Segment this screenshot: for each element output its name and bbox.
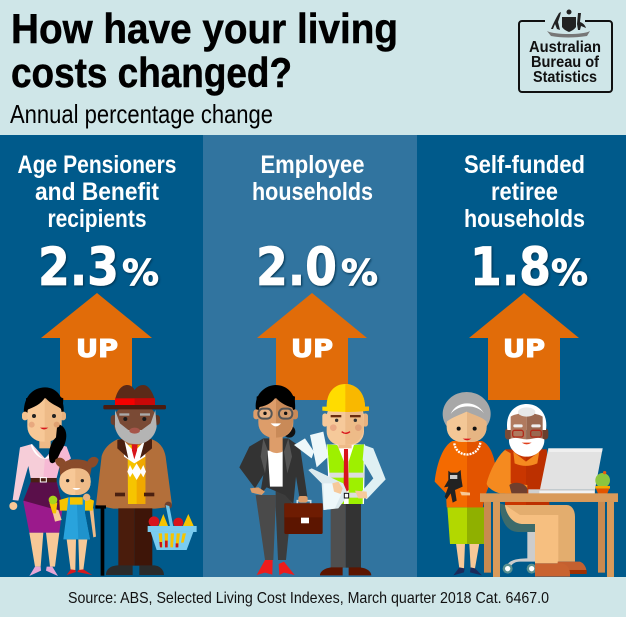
briefcase [284, 496, 323, 534]
heading: recipients [48, 205, 146, 233]
arrow: up: UP [503, 334, 545, 363]
heading: Self-funded [464, 151, 585, 179]
illustration: businesswoman and construction worker [239, 384, 386, 575]
percentage value: % [122, 253, 159, 294]
basket of fruit [148, 505, 197, 550]
title [11, 5, 398, 96]
percentage value: 1.8 [470, 237, 551, 298]
illustration: retired couple at a desk with laptop [435, 392, 618, 577]
subtitle: Annual percentage change [10, 99, 273, 129]
desk [480, 493, 618, 577]
percentage value: 2.0 [256, 237, 337, 298]
cat [444, 470, 463, 503]
heading: households [464, 205, 585, 233]
icon: coat of arms [547, 10, 590, 38]
logo text: Bureau of [531, 54, 600, 71]
logo text: Australian [529, 39, 601, 56]
businesswoman [239, 385, 323, 575]
heading: households [252, 178, 373, 206]
footer: source [0, 577, 626, 617]
panel: self-funded retiree households [417, 135, 626, 577]
heading [252, 151, 373, 206]
heading: Age Pensioners [18, 151, 176, 179]
cactus [595, 471, 610, 494]
heading [18, 151, 176, 233]
chair [500, 503, 537, 574]
percentage value: 2.3 [38, 237, 119, 298]
logo text [529, 39, 601, 86]
panel: age pensioners and benefit recipients [0, 135, 203, 577]
older man [487, 404, 587, 577]
illustration: woman, girl and older man with basket [9, 385, 197, 576]
heading: retiree [491, 178, 558, 206]
older woman [435, 392, 496, 575]
heading: Employee [260, 151, 365, 179]
logo text: Statistics [533, 69, 597, 86]
construction worker [294, 384, 386, 575]
arrow: up: UP [76, 334, 118, 363]
heading: and Benefit [35, 178, 160, 206]
man [96, 385, 172, 575]
arrow: up: UP [291, 334, 333, 363]
girl [49, 457, 99, 575]
woman [9, 387, 71, 576]
heading [464, 151, 585, 233]
footer: source: Source: ABS, Selected Living Cost Indexes, March quarter 2018 Cat. 6467.0 [68, 590, 549, 607]
logo: Australian Bureau of Statistics [519, 10, 612, 92]
percentage value: % [341, 253, 378, 294]
title: costs changed? [11, 49, 292, 96]
percentage value: % [551, 253, 588, 294]
walking cane [95, 505, 106, 576]
arrow: up [41, 293, 152, 400]
arrow: up [469, 293, 579, 400]
panel: employee households [203, 135, 417, 577]
laptop [528, 448, 603, 494]
title: How have your living [11, 5, 398, 52]
arrow: up [257, 293, 367, 400]
